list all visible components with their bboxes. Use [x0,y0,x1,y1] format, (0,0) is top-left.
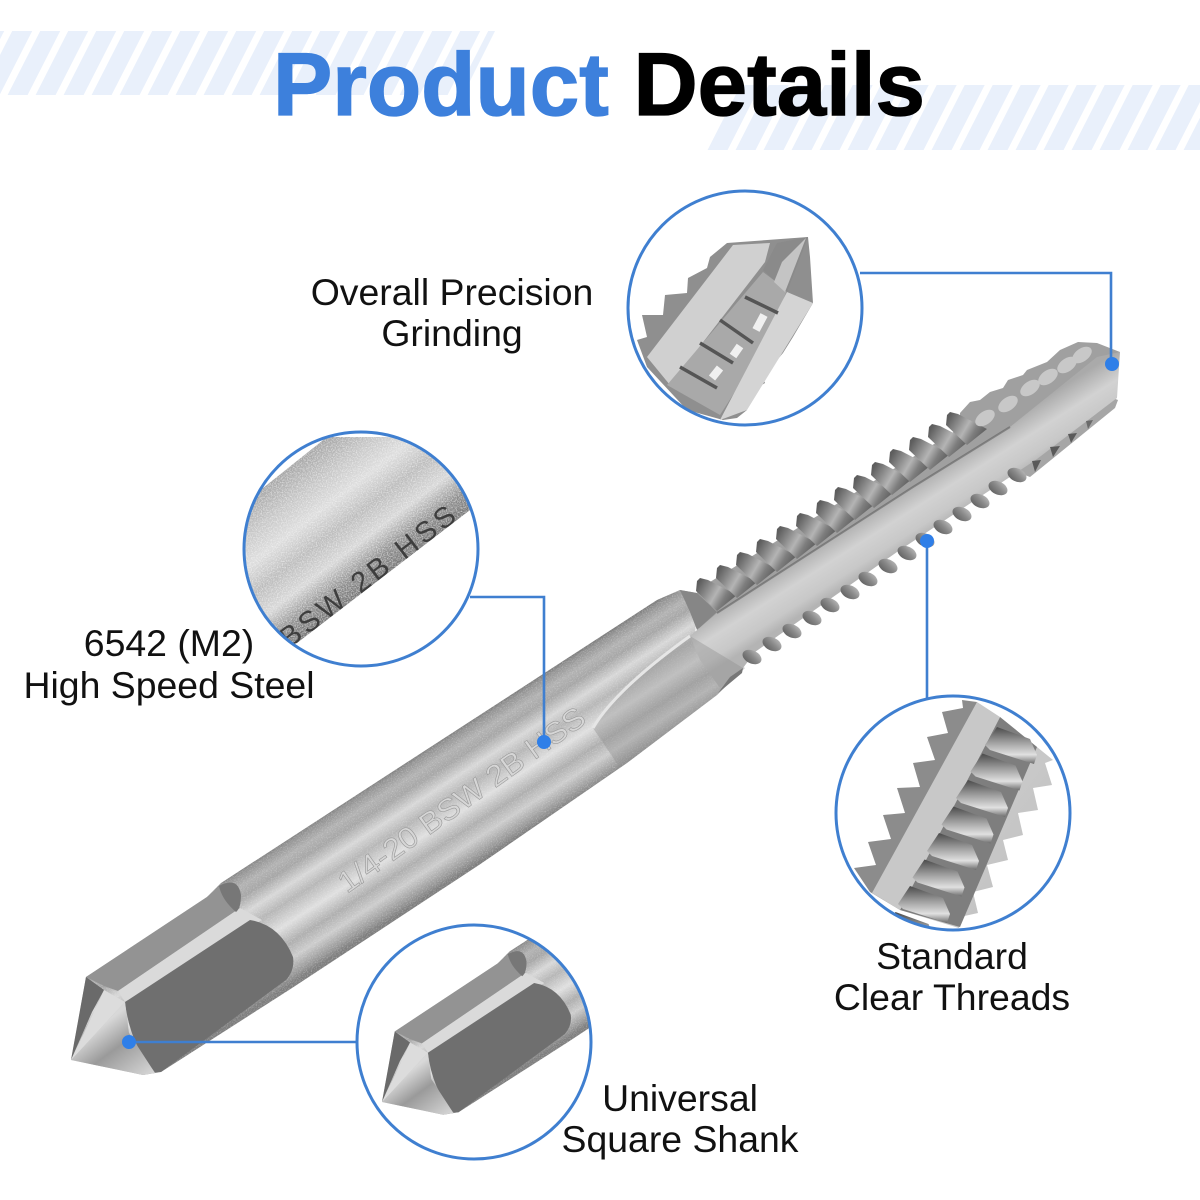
tap lower edge strip near point of thread [1017,398,1118,477]
magnifier: engraved shank [240,432,480,666]
callout: high speed steel [23,432,551,749]
tap square end: upper flat [86,884,240,991]
tap threads: upper teeth [696,342,1120,650]
tap point: cone [71,977,155,1075]
connector line [470,597,544,742]
tap square end: main flat [125,920,293,1072]
label: 6542 (M2) [84,622,254,664]
tap flute runout [593,636,743,768]
callout: overall precision grinding [311,191,1119,425]
connector line [860,273,1111,364]
connector dot [1105,357,1119,371]
magnifier: square shank [356,924,592,1160]
callout: universal square shank [122,924,798,1160]
tap engraving: 1/4-20 BSW 2B HSS [332,701,592,900]
label: Universal [602,1077,758,1119]
tap flute flat [690,352,1120,688]
connector dot [537,735,551,749]
callout: standard clear threads [834,534,1070,1018]
tap lower crescent [718,668,743,693]
background stripe band: right [705,85,1200,150]
label: High Speed Steel [23,664,315,706]
label: Overall Precision [311,271,593,313]
connector line [926,541,928,698]
connector line [128,1041,358,1043]
tap square end: notch [219,883,241,912]
label: Grinding [381,312,523,354]
tap flute root line [717,427,1010,613]
magnifier: engraved shank: BSW 2B HSS [274,499,462,655]
label: Clear Threads [834,976,1070,1018]
connector dot [122,1035,136,1049]
background stripe band: top left [0,31,495,95]
tap square end: ridge [118,908,262,1002]
magnifier: tap tip [628,191,862,425]
title: Product Details [273,34,925,134]
tap threads: lower teeth [740,420,1093,667]
label: Square Shank [562,1118,799,1160]
connector dot [920,534,934,548]
label: Standard [876,935,1028,977]
tap shank body [71,590,745,1075]
magnifier: thread detail [836,696,1070,949]
tap shoulder shading [680,590,717,630]
main product image: spiral tap [71,342,1120,1075]
